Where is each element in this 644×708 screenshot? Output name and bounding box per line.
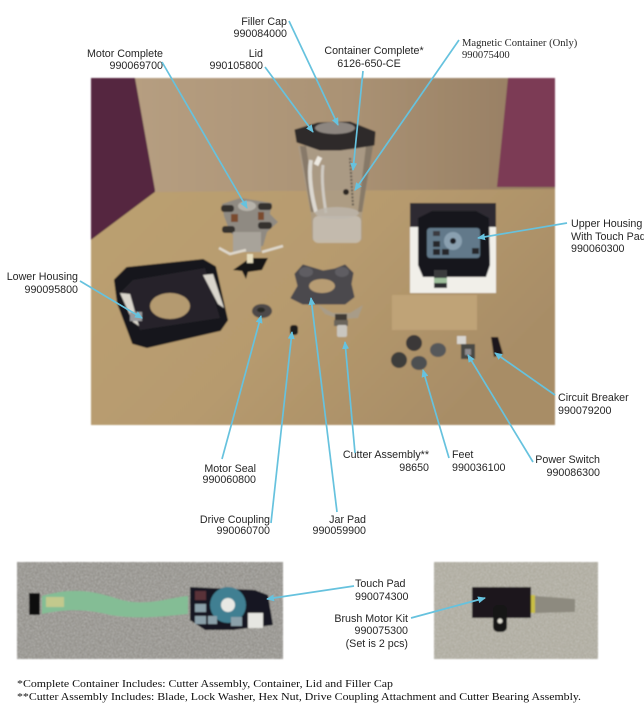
callout: Filler Cap [234, 16, 338, 125]
footnotes: *Complete Container Includes: Cutter Assembly, Container, Lid and Filler Cap [17, 678, 394, 690]
callout: Lower Housing [7, 271, 142, 318]
footnotes [17, 678, 581, 703]
callout: Lid: Lid [249, 48, 263, 60]
callout: Container Complete: 6126-650-CE [337, 58, 401, 70]
circuit breaker [491, 337, 503, 357]
motor complete [219, 198, 283, 279]
motor seal [252, 304, 272, 318]
callout: Motor Seal: 990060800 [202, 474, 256, 486]
wall backdrop [91, 78, 555, 194]
callout: Brush Motor Kit: (Set is 2 pcs) [346, 638, 408, 650]
callout: Upper Housing [478, 218, 644, 255]
callout: Motor Seal [202, 316, 261, 486]
callout: Lower Housing: 990095800 [24, 284, 78, 296]
callout: Drive Coupling: 990060700 [216, 525, 270, 537]
cutter assembly [318, 305, 363, 337]
callout: Circuit Breaker [495, 353, 629, 417]
callout: Container Complete [324, 45, 424, 170]
footnotes: **Cutter Assembly Includes: Blade, Lock Washer, Hex Nut, Drive Coupling Attachment and Cutter Bearing Assembly. [17, 691, 581, 703]
right purple panel [497, 78, 555, 187]
callout: Jar Pad: 990059900 [312, 525, 366, 537]
callout: Brush Motor Kit: 990075300 [354, 625, 408, 637]
callout: Magnetic Container: 990075400 [462, 50, 510, 61]
connector [29, 593, 40, 615]
callout: Power Switch: Power Switch [535, 454, 600, 466]
callout: Cutter Assembly: 98650 [399, 462, 429, 474]
main parts photo [91, 78, 555, 425]
callout: Touch Pad [267, 578, 409, 603]
callout: Feet [423, 370, 506, 474]
carbon brush [535, 596, 575, 613]
lower housing [115, 260, 227, 347]
callout: Magnetic Container [355, 38, 578, 190]
callout: Motor Complete [87, 48, 247, 208]
keypad [190, 587, 273, 630]
callout: Upper Housing: With Touch Pad [571, 231, 644, 243]
brush holder [472, 587, 531, 618]
brush motor kit photo [434, 562, 598, 659]
pale table patch [392, 295, 477, 330]
ribbon cable [42, 591, 188, 617]
callout: Circuit Breaker: 990079200 [558, 405, 612, 417]
callout: Lower Housing: Lower Housing [7, 271, 78, 283]
blender lid [295, 122, 375, 150]
feet [391, 335, 446, 370]
callout: Lid: 990105800 [210, 60, 263, 72]
callout: Lid [210, 48, 313, 132]
callout: Jar Pad: Jar Pad [329, 514, 366, 526]
left purple panel [91, 78, 155, 240]
callout: Brush Motor Kit [334, 598, 485, 650]
callout: Circuit Breaker: Circuit Breaker [558, 392, 629, 404]
callout: Brush Motor Kit: Brush Motor Kit [334, 613, 408, 625]
callout: Cutter Assembly [343, 342, 429, 474]
callout: Filler Cap: Filler Cap [241, 16, 287, 28]
callout: Drive Coupling [200, 332, 292, 537]
callout: Container Complete: Container Complete* [324, 45, 424, 57]
filler cap [315, 122, 355, 134]
touch pad photo [17, 562, 283, 659]
callout: Motor Complete: 990069700 [110, 60, 163, 72]
drive coupling [290, 325, 298, 335]
callout: Motor Seal: Motor Seal [204, 463, 256, 475]
jar pad [291, 265, 354, 304]
inset upper housing photo [410, 203, 496, 293]
callout: Touch Pad: 990074300 [355, 591, 409, 603]
callout: Feet: 990036100 [452, 462, 506, 474]
callout: Magnetic Container: Magnetic Container (Only) [462, 38, 578, 49]
callout: Jar Pad [311, 298, 366, 537]
callout: Filler Cap: 990084000 [234, 28, 287, 40]
tabletop [91, 189, 555, 425]
callout: Feet: Feet [452, 449, 473, 461]
callout: Power Switch: 990086300 [546, 467, 600, 479]
callout: Upper Housing: 990060300 [571, 243, 625, 255]
callout: Drive Coupling: Drive Coupling [200, 514, 270, 526]
blender container [295, 122, 375, 243]
callout: Touch Pad: Touch Pad [355, 578, 406, 590]
callout: Power Switch [468, 355, 600, 479]
callout: Cutter Assembly: Cutter Assembly** [343, 449, 429, 461]
callout: Upper Housing: Upper Housing [571, 218, 642, 230]
power switch [457, 336, 475, 359]
callout: Motor Complete: Motor Complete [87, 48, 163, 60]
